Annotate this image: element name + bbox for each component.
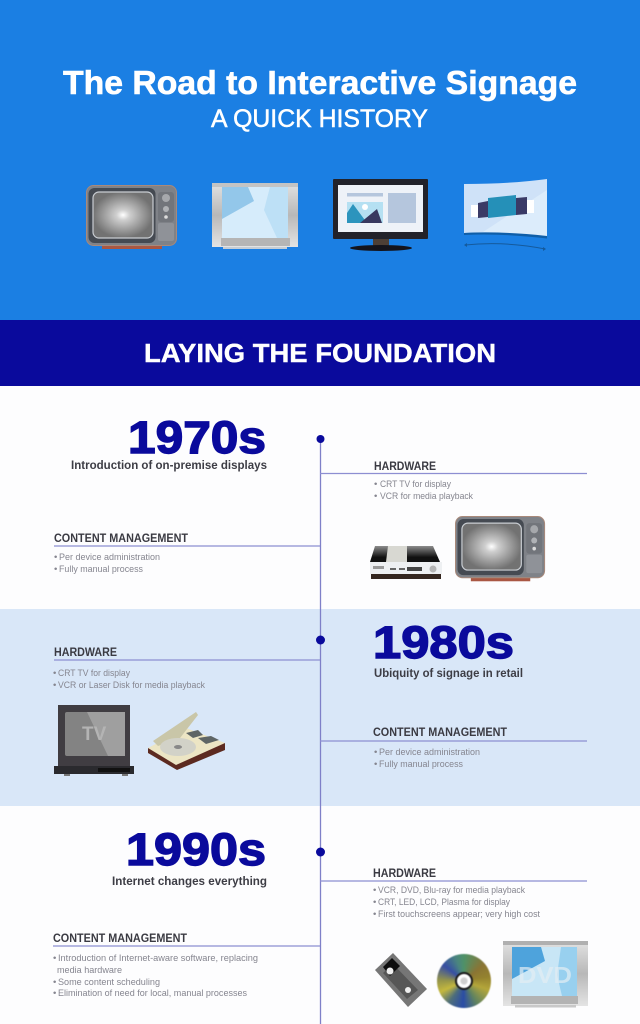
1990s hardware: • (373, 885, 376, 896)
1980s content management: CONTENT MANAGEMENT (373, 725, 508, 739)
icon: retro television (86, 186, 176, 249)
icon: VHS tape (375, 953, 427, 1007)
heading: laying the foundation: LAYING THE FOUNDATION (144, 338, 496, 368)
1970s hardware: VCR for media playback (380, 491, 473, 502)
1990s hardware: VCR, DVD, Blu-ray for media playback (378, 885, 525, 896)
1980s content management: Fully manual process (379, 759, 463, 770)
title: The Road to Interactive Signage (63, 64, 577, 101)
panel: 1980s background (0, 609, 640, 806)
1980s hardware: • (53, 680, 56, 691)
1990s content management: CONTENT MANAGEMENT (53, 931, 188, 945)
icon: curved display (464, 179, 547, 251)
icon: silver DVD television: DVD (518, 962, 572, 988)
1980s content management: Per device administration (379, 747, 480, 758)
1990s content management (53, 931, 320, 999)
icon: desktop monitor (333, 179, 428, 251)
1970s heading: 1970s (128, 412, 266, 463)
1990s content management: Elimination of need for local, manual processes (58, 988, 247, 999)
1970s content management: • (54, 564, 57, 575)
1990s hardware: HARDWARE (373, 866, 436, 880)
icon: flat CRT television: TV (82, 724, 107, 745)
1990s hardware: CRT, LED, LCD, Plasma for display (378, 897, 510, 908)
icon: compact disc (437, 954, 491, 1008)
1970s hardware: • (374, 479, 377, 490)
1980s hardware: CRT TV for display (58, 668, 130, 679)
1990s hardware: • (373, 909, 376, 920)
1990s hardware: First touchscreens appear; very high cost (378, 909, 540, 920)
1990s content management: Some content scheduling (58, 977, 160, 988)
1980s heading: 1980s (373, 617, 514, 668)
timeline (316, 435, 325, 1024)
1970s heading: Introduction of on-premise displays (71, 458, 267, 472)
1970s content management: CONTENT MANAGEMENT (54, 531, 189, 545)
icon: VCR (370, 546, 442, 579)
icon: flat CRT television (54, 705, 134, 776)
1990s hardware: • (373, 897, 376, 908)
1980s content management (320, 725, 587, 770)
1970s heading (71, 412, 267, 472)
1990s content management: • (53, 953, 56, 964)
1990s heading: Internet changes everything (112, 874, 267, 888)
panel: 1970s background (0, 386, 640, 609)
1990s content management: media hardware (57, 965, 122, 976)
1970s hardware: CRT TV for display (380, 479, 451, 490)
1990s heading: 1990s (126, 824, 266, 875)
icon: silver DVD television (503, 941, 588, 1008)
icon: laser disc player (148, 712, 225, 770)
1980s heading: Ubiquity of signage in retail (374, 666, 523, 680)
1980s hardware (53, 645, 320, 691)
1990s hardware (320, 866, 587, 920)
1970s content management: • (54, 552, 57, 563)
1980s heading (373, 617, 523, 680)
icon: silver flat television (212, 183, 298, 249)
panel: 1990s background (0, 806, 640, 1024)
1990s content management: Introduction of Internet-aware software, replacing (58, 953, 258, 964)
1990s content management: • (53, 988, 56, 999)
1970s content management: Per device administration (59, 552, 160, 563)
1970s content management (54, 531, 320, 575)
1980s content management: • (374, 759, 377, 770)
subtitle: A QUICK HISTORY (211, 105, 428, 133)
1970s content management: Fully manual process (59, 564, 143, 575)
1990s heading (112, 824, 267, 888)
header background (0, 0, 640, 320)
1970s hardware (320, 459, 587, 502)
1980s hardware: VCR or Laser Disk for media playback (58, 680, 205, 691)
1980s hardware: HARDWARE (54, 645, 117, 659)
icon: retro television (455, 517, 545, 581)
1970s hardware: HARDWARE (374, 459, 436, 473)
1980s content management: • (374, 747, 377, 758)
1970s hardware: • (374, 491, 377, 502)
1980s hardware: • (53, 668, 56, 679)
section band background (0, 320, 640, 386)
1990s content management: • (53, 977, 56, 988)
